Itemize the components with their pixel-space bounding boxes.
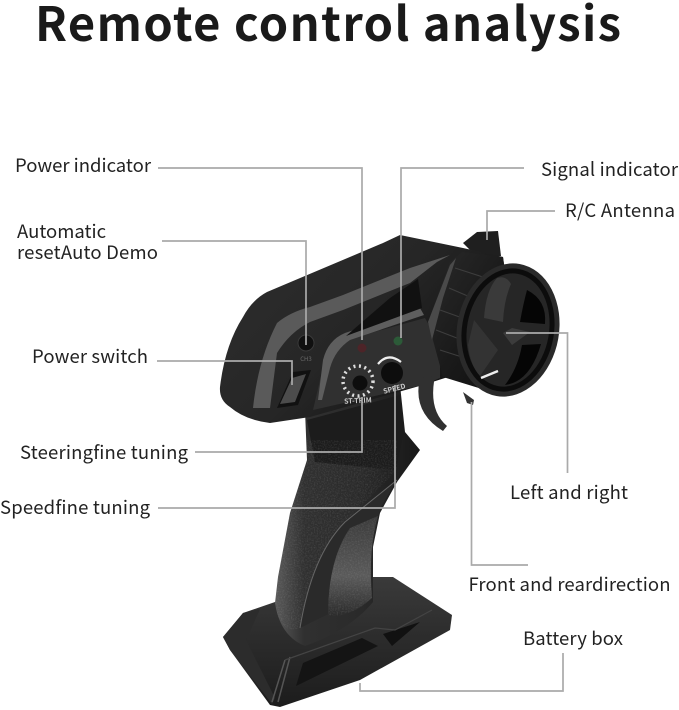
label: Automatic resetAuto Demo (17, 218, 158, 265)
power switch (277, 370, 311, 408)
remote control illustration (220, 231, 570, 707)
label: Automatic resetAuto Demo: resetAuto Demo (17, 239, 158, 265)
steering drum with ridges (428, 252, 520, 393)
pistol grip (270, 385, 420, 646)
lower control panel (313, 318, 440, 410)
label: Front and reardirection: Front and reardirection (468, 571, 670, 597)
label: Automatic resetAuto Demo: Automatic (17, 218, 106, 244)
white highlight on wheel (481, 371, 498, 378)
black wedge (346, 279, 422, 336)
throttle tab (463, 392, 474, 405)
steering wheel (446, 255, 570, 405)
main body: SPEED (382, 381, 407, 397)
battery box base (223, 577, 452, 707)
panel labels: ST-TRIM (344, 395, 372, 407)
antenna (463, 231, 501, 258)
grey stripe (253, 255, 450, 408)
main body (220, 235, 515, 423)
label: Battery box: Battery box (523, 625, 623, 651)
label: Speedfine tuning: Speedfine tuning (0, 494, 151, 520)
label: Power switch: Power switch (32, 343, 148, 369)
trigger (418, 376, 447, 431)
CH3 button (298, 335, 314, 351)
label: Left and right: Left and right (510, 479, 628, 505)
callout lines (157, 168, 568, 691)
signal indicator (394, 336, 402, 346)
second stripe (318, 308, 424, 400)
label: R/C Antenna: R/C Antenna (565, 197, 675, 223)
label: Steeringfine tuning: Steeringfine tuning (20, 439, 189, 465)
steering trim dial (343, 366, 373, 396)
power indicator (358, 344, 366, 352)
main body: CH3 (300, 354, 312, 363)
wheel openings (484, 277, 511, 322)
label: Power indicator: Power indicator (15, 152, 152, 178)
hub spokes (503, 328, 530, 345)
speed knob (378, 357, 401, 364)
label: Signal indicator: Signal indicator (541, 156, 679, 182)
